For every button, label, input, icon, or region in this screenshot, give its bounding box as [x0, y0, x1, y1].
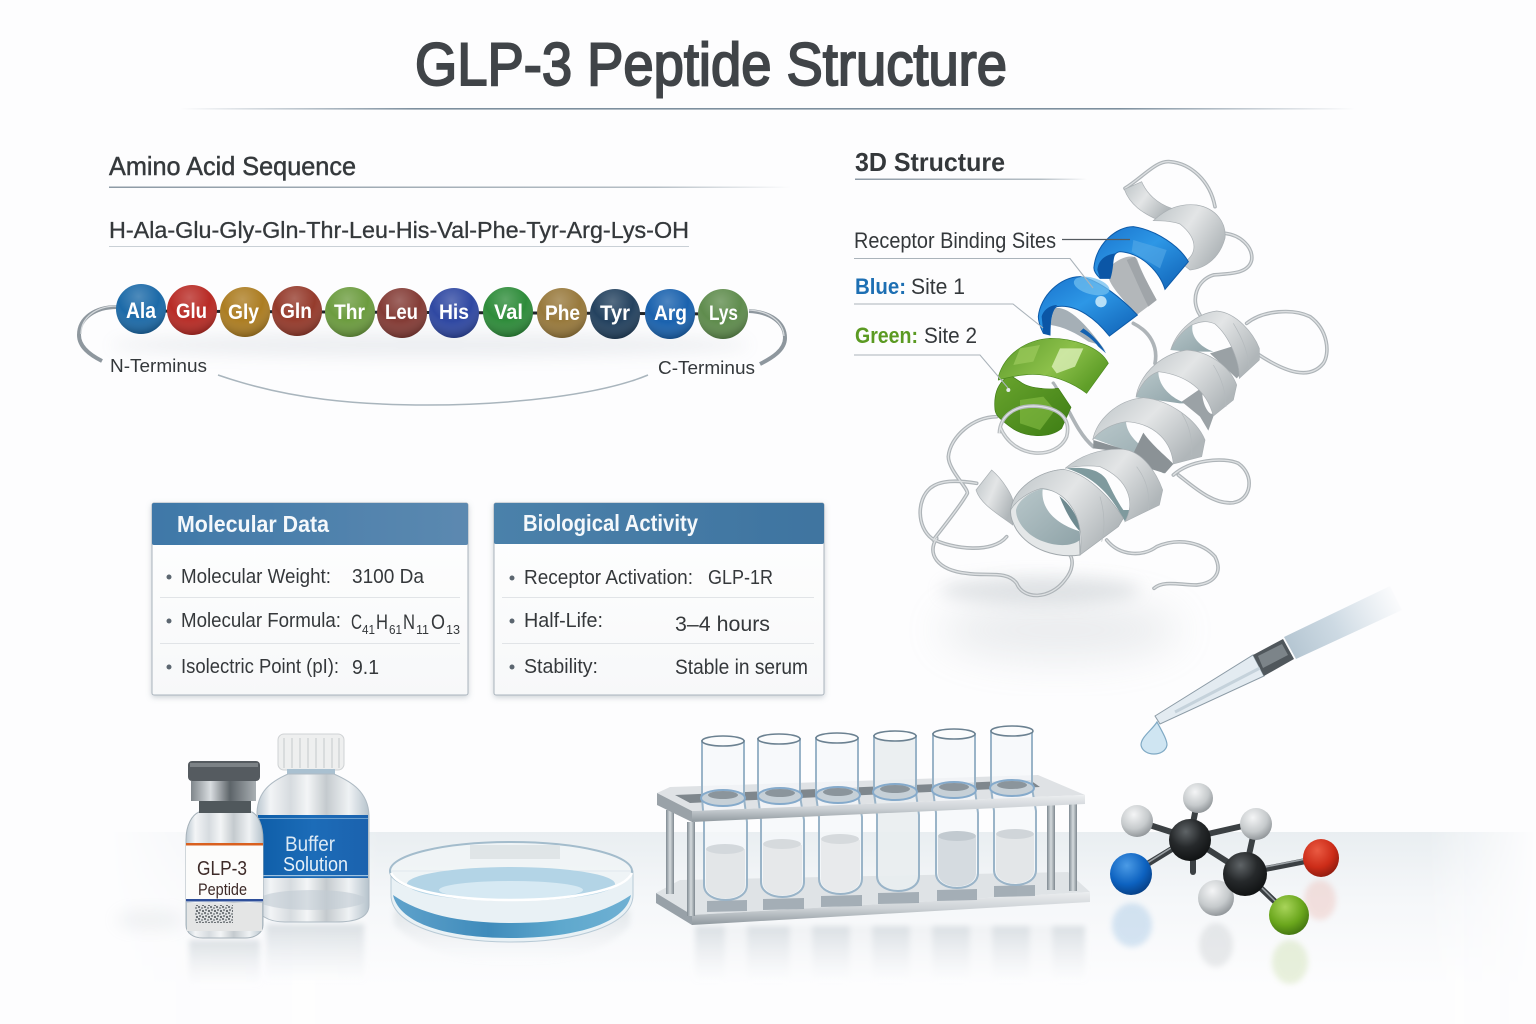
row: stability [510, 655, 808, 679]
atom: red [1303, 839, 1339, 877]
rack top plate [657, 775, 1085, 811]
row: molecular formula: 13 [446, 622, 460, 637]
peptide chain diagram [79, 284, 785, 405]
atom: white upper right [1240, 808, 1272, 840]
illustration: petri dish [390, 842, 633, 964]
rack front post [687, 822, 695, 916]
test tube 1 [701, 736, 747, 900]
illustration: GLP-3 peptide vial and buffer bottle [116, 734, 369, 986]
test tube 4 [873, 731, 919, 891]
row: half-life [510, 609, 770, 636]
bead: Lys: Lys [709, 302, 738, 325]
row: receptor activation: GLP-1R [708, 566, 773, 589]
test tube 5 [932, 729, 978, 888]
row: molecular formula: Molecular Formula: [181, 609, 341, 632]
bead: Leu: Leu [385, 301, 418, 324]
rack back posts [666, 803, 1077, 894]
row: molecular formula: N [403, 611, 415, 634]
bead: Leu [377, 288, 427, 338]
illustration: test tube rack [656, 726, 1090, 982]
label: green site 2: Green: [855, 323, 918, 348]
row: molecular formula: 41 [362, 622, 375, 637]
helix coil 2 [1065, 449, 1163, 522]
atom: blue [1110, 853, 1152, 895]
water droplet [1141, 722, 1167, 754]
atom: carbon one [1169, 819, 1211, 861]
rack front plate [657, 793, 1085, 822]
bead: Tyr: Tyr [600, 302, 630, 325]
helix coil 5 [1171, 311, 1259, 378]
coil passing in front of green [999, 406, 1068, 453]
rack reflection [695, 926, 1085, 982]
row: molecular weight [166, 565, 425, 588]
bead: Glu [167, 285, 217, 335]
bead: Gly [220, 287, 270, 337]
loops and side strands [920, 162, 1327, 595]
bead: Gln: Gln [280, 300, 312, 323]
buffer solution bottle [257, 734, 369, 922]
bead: Thr [325, 287, 375, 337]
atom: white upper left [1121, 805, 1153, 837]
row: molecular formula: O [431, 611, 445, 634]
illustration: pipette with droplet [1141, 586, 1402, 754]
helix coil 1: front opening [1011, 469, 1123, 556]
label: receptor binding sites: Receptor Binding Sites [854, 228, 1056, 253]
row: receptor activation [510, 566, 773, 589]
green site 2 ribbon [995, 338, 1108, 453]
label: receptor binding sites [854, 228, 1130, 288]
atom: white lower [1198, 880, 1234, 916]
molecule reflections [1112, 880, 1336, 984]
panel: biological activity [494, 503, 824, 695]
peptide vial: Peptide [198, 880, 247, 899]
row: half-life: Half-Life: [524, 609, 603, 632]
test tube 6 [990, 726, 1036, 885]
label: N-Terminus: N-Terminus [110, 355, 207, 376]
bead: Thr: Thr [334, 301, 365, 324]
panel: molecular data [152, 503, 468, 695]
bead: Val: Val [494, 301, 523, 324]
label: green site 2: Site 2 [924, 323, 977, 348]
bead: Glu: Glu [176, 300, 207, 323]
bead: Tyr [590, 289, 640, 339]
header: biological activity [494, 503, 824, 544]
helix coil 3 [1093, 398, 1205, 473]
heading: amino acid sequence: Amino Acid Sequence [109, 151, 356, 181]
row: isolectric point: Isolectric Point (pI): [181, 655, 339, 678]
header: biological activity: Biological Activity [523, 510, 698, 536]
bead: Gln [272, 286, 322, 336]
atom: white top [1183, 783, 1213, 813]
panel: amino acid sequence [79, 151, 791, 405]
helix coils [1011, 311, 1259, 556]
atom: green [1269, 895, 1309, 935]
bead: Phe: Phe [545, 302, 580, 325]
row: stability: Stability: [524, 655, 598, 678]
row: molecular formula: 61 [389, 622, 402, 637]
blue and green binding site ribbons [1038, 227, 1188, 353]
bracket arc [218, 375, 648, 405]
row: receptor activation: Receptor Activation: [524, 566, 693, 589]
test tube 2 [758, 734, 804, 897]
buffer solution bottle: Buffer [285, 833, 335, 856]
peptide vial: GLP-3 [197, 857, 247, 880]
bead: Arg [645, 289, 695, 339]
blue site 1 ribbon [1094, 227, 1188, 315]
header: molecular data: Molecular Data [177, 511, 330, 537]
helix coil 4 [1136, 350, 1237, 431]
bead: Arg: Arg [654, 302, 687, 325]
bonds [1131, 798, 1321, 915]
row: molecular formula: C [351, 611, 362, 634]
bead: His: His [439, 301, 469, 324]
row: molecular formula: H [376, 611, 388, 634]
header: molecular data [152, 503, 468, 545]
row: half-life: 3–4 hours [675, 612, 770, 636]
row: isolectric point: 9.1 [352, 656, 379, 679]
label: green site 2 [854, 323, 1008, 388]
title: GLP-3 Peptide Structure [415, 31, 1007, 98]
protein ribbon model [920, 162, 1327, 595]
floor shadow under protein [940, 576, 1180, 660]
test tube 3 [816, 733, 862, 894]
row: molecular weight: Molecular Weight: [181, 565, 331, 588]
peptide vial [186, 761, 263, 938]
row: molecular weight: 3100 Da [352, 565, 425, 588]
label: blue site 1 [854, 274, 1043, 328]
row: molecular formula: 11 [416, 622, 429, 637]
buffer solution bottle: Solution [283, 854, 348, 876]
illustration: ball and stick molecule [1110, 783, 1339, 984]
bead: Gly: Gly [228, 301, 259, 324]
bead: Phe [537, 288, 587, 338]
panel: 3D structure [854, 147, 1327, 660]
rack base [656, 872, 1090, 925]
heading: 3D structure: 3D Structure [855, 147, 1005, 177]
row: molecular formula [166, 609, 460, 637]
row: stability: Stable in serum [675, 656, 808, 679]
sequence text: H-Ala-Glu-Gly-Gln-Thr-Leu-His-Val-Phe-Tyr-Arg-Lys-OH [109, 217, 689, 243]
label: blue site 1: Site 1 [911, 274, 965, 299]
blue site 2 ribbon [1038, 273, 1137, 353]
bead: Ala: Ala [126, 298, 157, 323]
bead: His [429, 288, 479, 338]
bead: Ala [116, 284, 166, 334]
bead: Val [483, 287, 533, 337]
vial and bottle reflections [116, 910, 364, 986]
bead: Lys [698, 289, 748, 339]
atom: carbon two [1223, 852, 1267, 896]
label: blue site 1: Blue: [855, 274, 906, 299]
label: C-Terminus: C-Terminus [658, 357, 755, 378]
